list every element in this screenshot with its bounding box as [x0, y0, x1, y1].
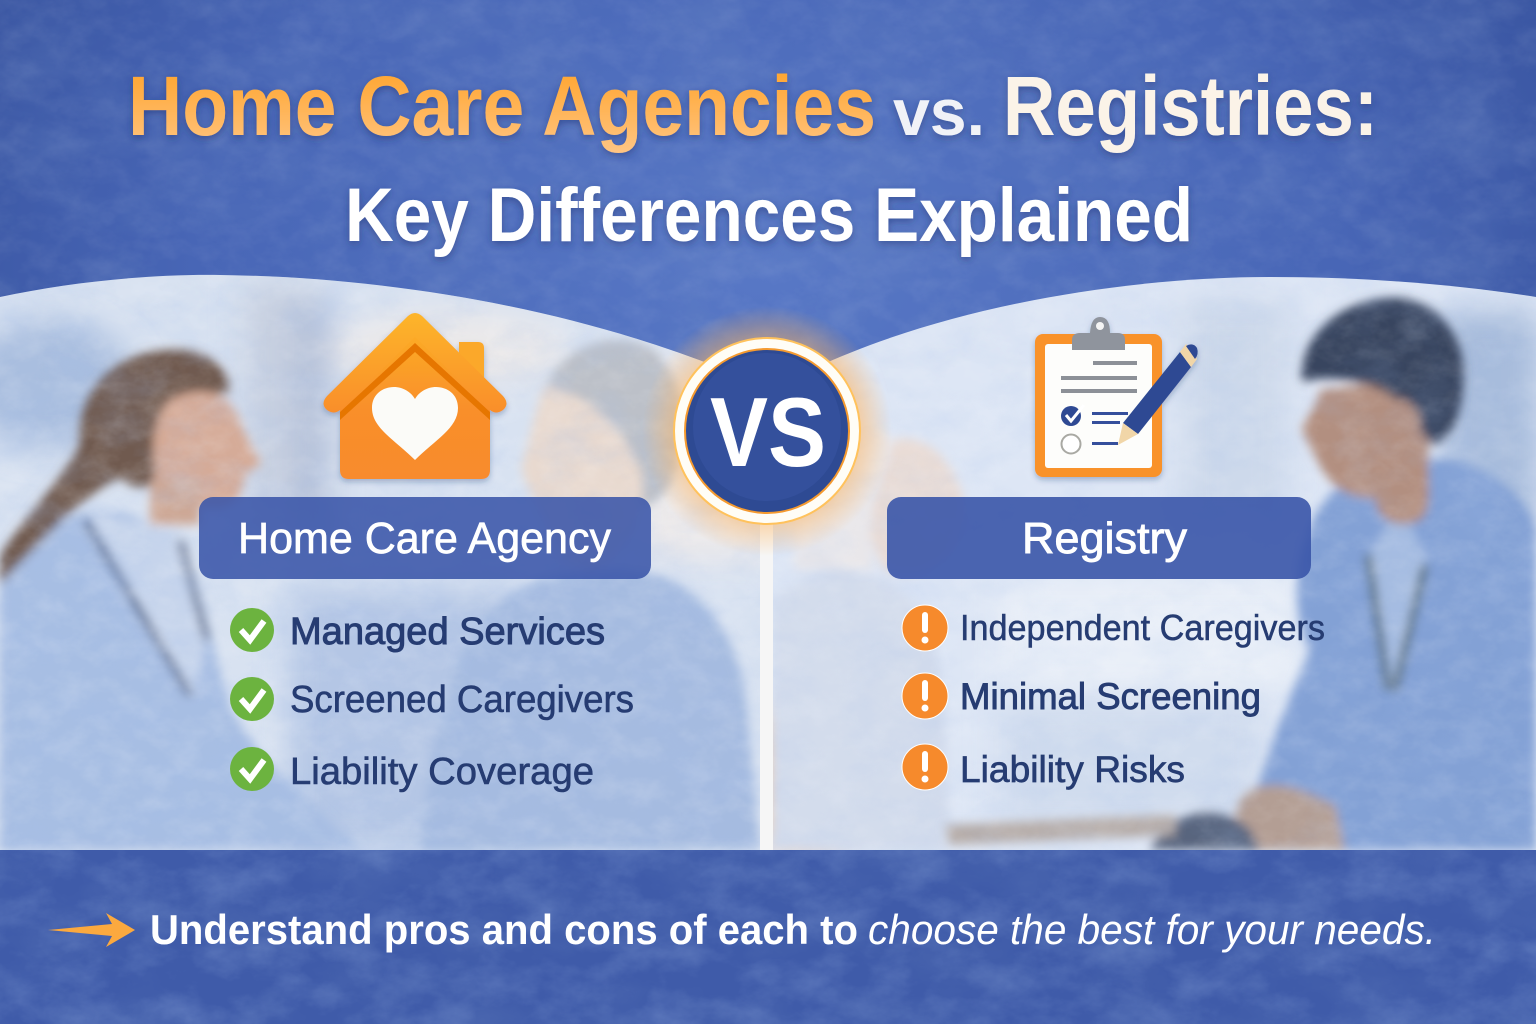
- bottom band: [0, 850, 1536, 1024]
- title: Key Differences Explained: [345, 173, 1193, 258]
- VS badge: [642, 306, 892, 556]
- callout text: Understand pros and cons of each to: [150, 906, 858, 953]
- heading: Registry: Registry: [1022, 514, 1187, 563]
- heading: Home Care Agency: [199, 497, 651, 579]
- arrow: [48, 913, 135, 947]
- item: liability risks: Liability Risks: [960, 749, 1185, 790]
- item: liability coverage: Liability Coverage: [290, 751, 594, 793]
- list: agency benefits: [230, 608, 634, 793]
- item: screened caregivers: Screened Caregivers: [290, 679, 634, 721]
- list: registry risks: [902, 605, 1325, 790]
- photo: caregiver: [945, 298, 1536, 850]
- heading: Registry: [887, 497, 1311, 579]
- panel: home care agency photo: [0, 270, 770, 850]
- item: minimal screening: Minimal Screening: [960, 676, 1261, 717]
- title: Registries:: [1003, 59, 1378, 153]
- callout text: choose the best for your needs.: [868, 906, 1436, 953]
- heading: Home Care Agency: Home Care Agency: [238, 514, 611, 563]
- title: Home Care Agencies: [128, 59, 876, 153]
- title: [128, 59, 1378, 258]
- item: managed services: Managed Services: [290, 611, 605, 653]
- panel: registry photo: [730, 270, 1536, 850]
- photo: elderly client: [772, 424, 965, 850]
- icon: clipboard with pen: [1035, 317, 1198, 477]
- title: vs.: [893, 75, 985, 149]
- callout text: [150, 906, 1436, 953]
- icon: house with heart: [324, 313, 506, 479]
- center divider: [760, 510, 773, 850]
- VS badge: VS: [710, 377, 826, 487]
- photo: elderly woman: [420, 340, 760, 850]
- item: independent caregivers: Independent Caregivers: [960, 607, 1325, 648]
- photo: nurse: [0, 350, 360, 850]
